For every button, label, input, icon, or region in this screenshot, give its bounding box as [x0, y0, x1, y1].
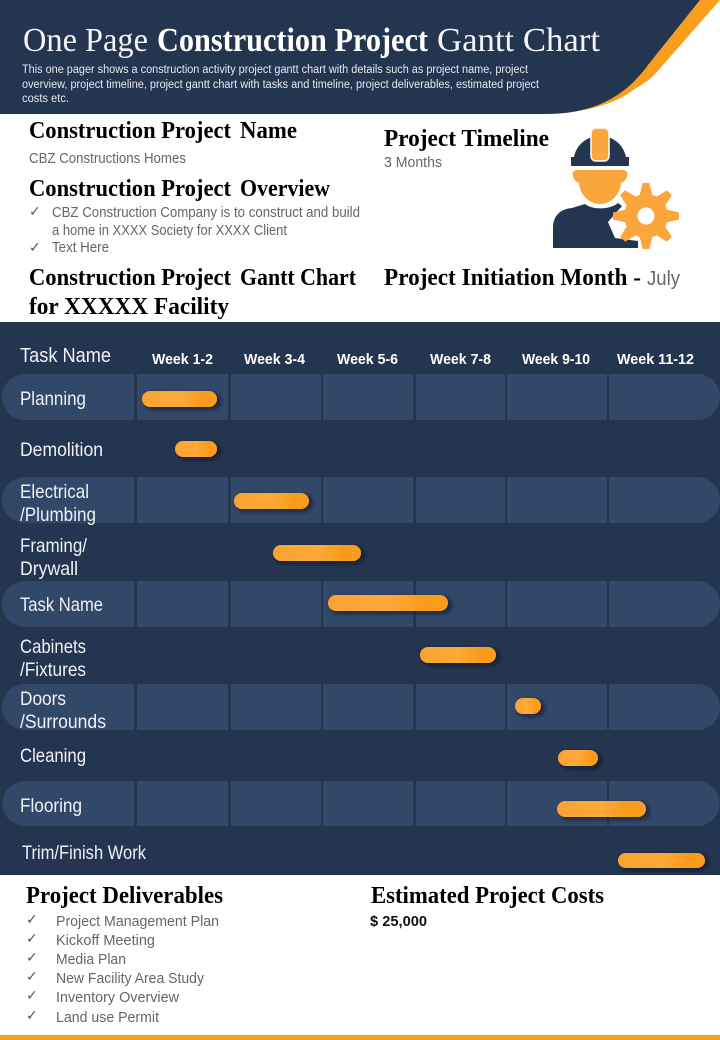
title: Construction Project [157, 22, 429, 59]
panel: project overview: Overview [240, 176, 331, 202]
task labels: /Surrounds [20, 711, 106, 733]
row band: doors [2, 684, 720, 730]
task labels: Demolition [20, 439, 103, 461]
panel: project overview: a home in XXXX Society for XXXX Client [52, 222, 288, 239]
task labels: Electrical [20, 481, 89, 503]
column headers: Week 1-2 [152, 351, 213, 368]
panel: project deliverables: Project Management Plan [56, 913, 219, 930]
title: Gantt Chart [437, 22, 601, 59]
helmet stripe [591, 128, 609, 161]
task labels: Drywall [20, 558, 78, 580]
panel: project name: Name [240, 118, 297, 144]
description: costs etc. [22, 93, 69, 105]
heading: initiation month: July [647, 268, 680, 290]
row band: electrical [2, 477, 720, 523]
title [23, 22, 601, 59]
task labels: Trim/Finish Work [22, 842, 146, 864]
column headers: Task Name [20, 344, 111, 367]
heading: initiation month: Project Initiation Month - [384, 265, 641, 291]
panel: estimated project costs: Estimated Project Costs [371, 883, 604, 909]
description: overview, project timeline, project gantt chart with tasks and timeline, project deliverables, estimated project [22, 79, 540, 91]
panel: project overview: ✓ [29, 240, 41, 256]
panel: project timeline: 3 Months [384, 154, 442, 171]
column headers: Week 7-8 [430, 351, 491, 368]
row band: planning [2, 374, 720, 420]
gear [613, 183, 679, 249]
helmet dome [571, 137, 629, 166]
task labels: Framing/ [20, 535, 88, 557]
navy banner shape [0, 0, 700, 114]
task labels: Planning [20, 388, 86, 410]
panel: project deliverables: Inventory Overview [56, 989, 179, 1006]
header banner [0, 0, 720, 114]
description: This one pager shows a construction activity project gantt chart with details such as project name, project [22, 64, 529, 76]
panel: project name [29, 118, 297, 167]
panel: project deliverables: ✓ [26, 950, 38, 966]
worker body [553, 203, 638, 248]
panel: project name: Construction Project [29, 118, 231, 144]
panel: project deliverables: Land use Permit [56, 1009, 160, 1026]
panel: project overview [29, 176, 360, 256]
panel: project deliverables: Kickoff Meeting [56, 932, 155, 949]
panel: project name: CBZ Constructions Homes [29, 150, 186, 167]
row band: task name [2, 581, 720, 627]
heading: gantt chart title: for XXXXX Facility [29, 294, 229, 320]
task bars [142, 391, 705, 868]
description [22, 64, 540, 105]
panel: project deliverables: Media Plan [56, 951, 126, 968]
panel: project deliverables: ✓ [26, 912, 38, 928]
panel: project overview: CBZ Construction Company is to construct and build [52, 204, 360, 221]
column headers: Week 9-10 [522, 351, 590, 368]
heading: gantt chart title [29, 265, 356, 320]
task labels: Doors [20, 688, 66, 710]
gantt chart [0, 322, 720, 875]
task labels: /Fixtures [20, 659, 86, 681]
row band: flooring [3, 781, 720, 826]
panel: project deliverables: ✓ [26, 969, 38, 985]
task labels: /Plumbing [20, 504, 96, 526]
footer bar [0, 1035, 720, 1040]
panel: project deliverables: ✓ [26, 931, 38, 947]
task labels: Cleaning [20, 745, 86, 767]
chart background [0, 322, 720, 875]
panel: project overview: Text Here [52, 239, 109, 256]
panel: project timeline [384, 126, 549, 171]
panel: estimated project costs: $ 25,000 [370, 913, 427, 930]
panel: project deliverables: ✓ [26, 1008, 38, 1024]
panel: project deliverables: New Facility Area Study [56, 970, 204, 987]
panel: estimated project costs [370, 883, 604, 930]
task labels [20, 388, 146, 864]
panel: project deliverables: Project Deliverables [26, 883, 223, 909]
panel: project overview: ✓ [29, 204, 41, 220]
panel: project deliverables: ✓ [26, 988, 38, 1004]
task labels: Flooring [20, 795, 82, 817]
column headers: Week 3-4 [244, 351, 306, 368]
column headers [20, 344, 694, 368]
heading: gantt chart title: Construction Project [29, 265, 231, 291]
face [573, 170, 627, 204]
panel: project overview: Construction Project [29, 176, 231, 202]
title: One Page [23, 22, 148, 59]
panel: project timeline: Project Timeline [384, 126, 549, 152]
heading: gantt chart title: Gantt Chart [240, 265, 356, 291]
column headers: Week 5-6 [337, 351, 398, 368]
column headers: Week 11-12 [617, 351, 694, 368]
task labels: Cabinets [20, 636, 86, 658]
icon: construction worker with gear [553, 128, 679, 249]
orange swoosh [540, 0, 720, 114]
panel: project deliverables [26, 883, 223, 1026]
task labels: Task Name [20, 594, 103, 616]
